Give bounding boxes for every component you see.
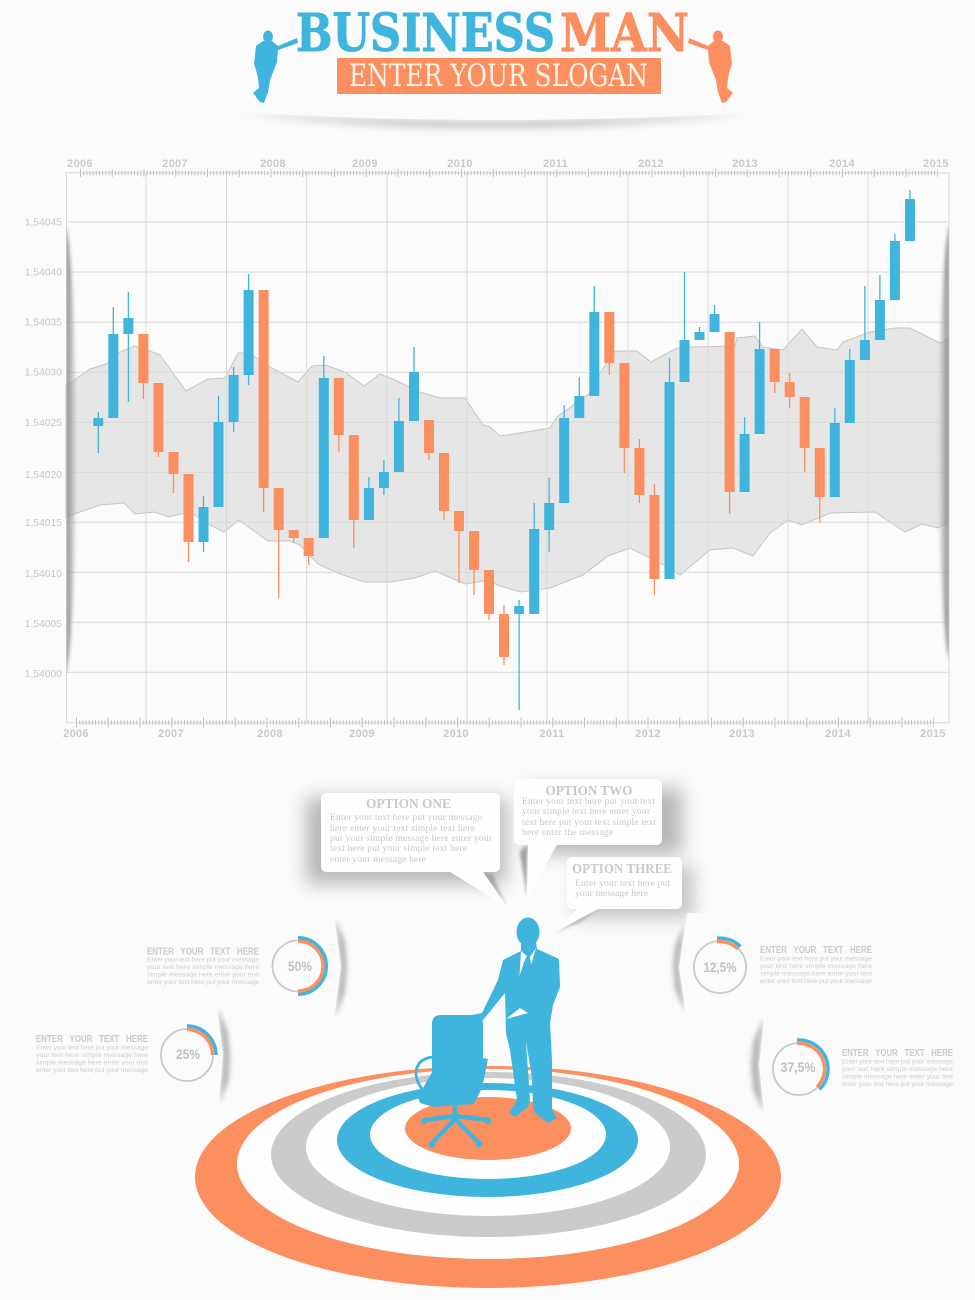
callout: option one: OPTION ONE xyxy=(366,797,451,812)
text block: 37,5%: Enter your text here put your message xyxy=(842,1058,953,1066)
top year labels: 2011 xyxy=(543,158,568,170)
top year labels: 2012 xyxy=(638,158,664,170)
top year labels: 2013 xyxy=(732,158,758,170)
icon: orange businessman leaning on title xyxy=(688,30,733,103)
donut: 37,5%: 37,5% xyxy=(780,1060,816,1075)
donut: 50%: 50% xyxy=(288,959,312,974)
blue candles xyxy=(93,190,915,710)
top year labels xyxy=(67,158,949,170)
top year labels: 2014 xyxy=(829,158,855,170)
callout: option two: here enter the message xyxy=(522,828,613,838)
slogan banner: ENTER YOUR SLOGAN xyxy=(349,58,648,94)
bottom year labels: 2013 xyxy=(729,728,755,740)
callout: option one: put your simple message here enter your xyxy=(330,834,493,844)
y axis labels: 1,54035 xyxy=(25,318,62,328)
top axis ticks xyxy=(80,171,938,175)
target rings xyxy=(195,1066,781,1288)
y axis labels: 1,54020 xyxy=(25,470,62,481)
bottom year labels: 2008 xyxy=(257,728,283,740)
callout: option one: enter your message here xyxy=(330,855,426,865)
y axis labels: 1,54010 xyxy=(25,569,62,580)
text block: 25%: ENTER YOUR TEXT HERE xyxy=(36,1033,148,1045)
y axis labels: 1,54025 xyxy=(25,418,62,429)
bottom year labels: 2010 xyxy=(443,728,469,740)
callout: option two: text here put your text simple text xyxy=(522,818,656,828)
callout: option one: Enter your text here put your message xyxy=(330,813,482,823)
text block: 50%: ENTER YOUR TEXT HERE xyxy=(147,946,259,958)
text block: 12,5%: Enter your text here put your message xyxy=(760,956,872,962)
text block: 25% xyxy=(36,1033,148,1074)
text block: 25%: enter your text here put your message xyxy=(36,1067,148,1074)
callout: option two: OPTION TWO xyxy=(546,784,633,799)
speech bubble shadows xyxy=(306,788,693,933)
bottom year labels: 2015 xyxy=(920,728,946,740)
bottom year labels: 2009 xyxy=(349,728,375,740)
text block: 50%: Enter your text here put your message xyxy=(147,956,259,964)
bottom year labels: 2014 xyxy=(825,728,851,740)
text block: 50%: your text here simple message here xyxy=(147,964,259,971)
bottom year labels: 2006 xyxy=(63,728,89,740)
donut: 25%: 25% xyxy=(176,1047,200,1062)
title: BUSINESS xyxy=(296,3,555,64)
icon: standing businessman xyxy=(467,918,560,1123)
candlestick chart xyxy=(25,158,949,740)
donut: 50% xyxy=(272,938,326,994)
text block: 12,5%: ENTER YOUR TEXT HERE xyxy=(760,944,872,956)
text block: 37,5%: enter your text here put your message xyxy=(842,1081,953,1088)
top year labels: 2008 xyxy=(260,158,286,170)
top year labels: 2015 xyxy=(923,158,949,170)
callout: option three: OPTION THREE xyxy=(572,862,672,877)
text block: 12,5%: simple message here enter your text xyxy=(760,970,872,978)
top year labels: 2010 xyxy=(447,158,473,170)
text block: 12,5% xyxy=(760,944,872,985)
text block: 50% xyxy=(147,946,259,986)
top year labels: 2006 xyxy=(67,158,93,170)
text block: 25%: your text here simple message here xyxy=(36,1052,148,1059)
text block: 12,5%: enter your text here put your message xyxy=(760,978,872,985)
donut: 12,5%: 12,5% xyxy=(704,960,736,975)
callout: option three: Enter your text here put xyxy=(575,879,670,889)
shirt collar xyxy=(520,948,536,976)
text block: 37,5%: your text here simple message here xyxy=(842,1066,953,1073)
bottom year labels: 2007 xyxy=(158,728,184,740)
y axis labels xyxy=(25,218,62,680)
y axis labels: 1,54005 xyxy=(25,619,62,630)
fold shadows beside donut panels xyxy=(218,918,763,1112)
text block: 12,5%: your text here simple message here xyxy=(760,963,872,970)
bottom year labels xyxy=(63,728,946,740)
bottom year labels: 2011 xyxy=(539,728,565,740)
grid lines xyxy=(66,172,949,723)
top year labels: 2007 xyxy=(162,158,188,170)
donut: 37,5% xyxy=(773,1040,828,1095)
paper panels covering the fold shadows xyxy=(190,908,793,1122)
text block: 37,5%: simple message here enter your text xyxy=(842,1074,953,1080)
y axis labels: 1,54015 xyxy=(25,518,62,529)
callout: option one xyxy=(321,793,507,907)
text block: 25%: simple message here enter your text xyxy=(36,1060,148,1066)
callout: option three: your message here xyxy=(575,889,648,899)
y axis labels: 1,54040 xyxy=(25,268,62,278)
bottom year labels: 2012 xyxy=(635,728,661,740)
pocket square xyxy=(506,1008,528,1019)
callout: option two: Enter your text here put yout text xyxy=(522,797,655,807)
callout: option two: your simple text here enter your xyxy=(522,807,651,817)
volatility band xyxy=(66,328,949,592)
edge shadows xyxy=(66,225,949,675)
icon: office chair xyxy=(416,1015,491,1148)
header paper shadow xyxy=(225,85,765,128)
top year labels: 2009 xyxy=(352,158,378,170)
donut: 12,5% xyxy=(694,938,746,993)
text block: 50%: simple message here enter your text xyxy=(147,972,259,978)
callout: option two xyxy=(514,779,662,898)
text block: 37,5% xyxy=(842,1047,953,1088)
y axis labels: 1,54045 xyxy=(25,218,62,228)
y axis labels: 1,54000 xyxy=(25,669,62,680)
icon: blue businessman leaning on title xyxy=(253,30,298,103)
text block: 25%: Enter your text here put your message xyxy=(36,1044,148,1052)
callout: option one: here enter your text simple text here xyxy=(330,824,475,834)
title: MAN xyxy=(560,3,689,64)
donut: 25% xyxy=(161,1026,216,1081)
orange candles xyxy=(138,290,825,665)
callout: option one: text here put your simple text here xyxy=(330,844,467,854)
text block: 50%: enter your text here put your message xyxy=(147,979,259,986)
bottom axis ticks xyxy=(76,720,934,725)
callout: option three xyxy=(553,857,682,933)
y axis labels: 1,54030 xyxy=(25,368,62,378)
